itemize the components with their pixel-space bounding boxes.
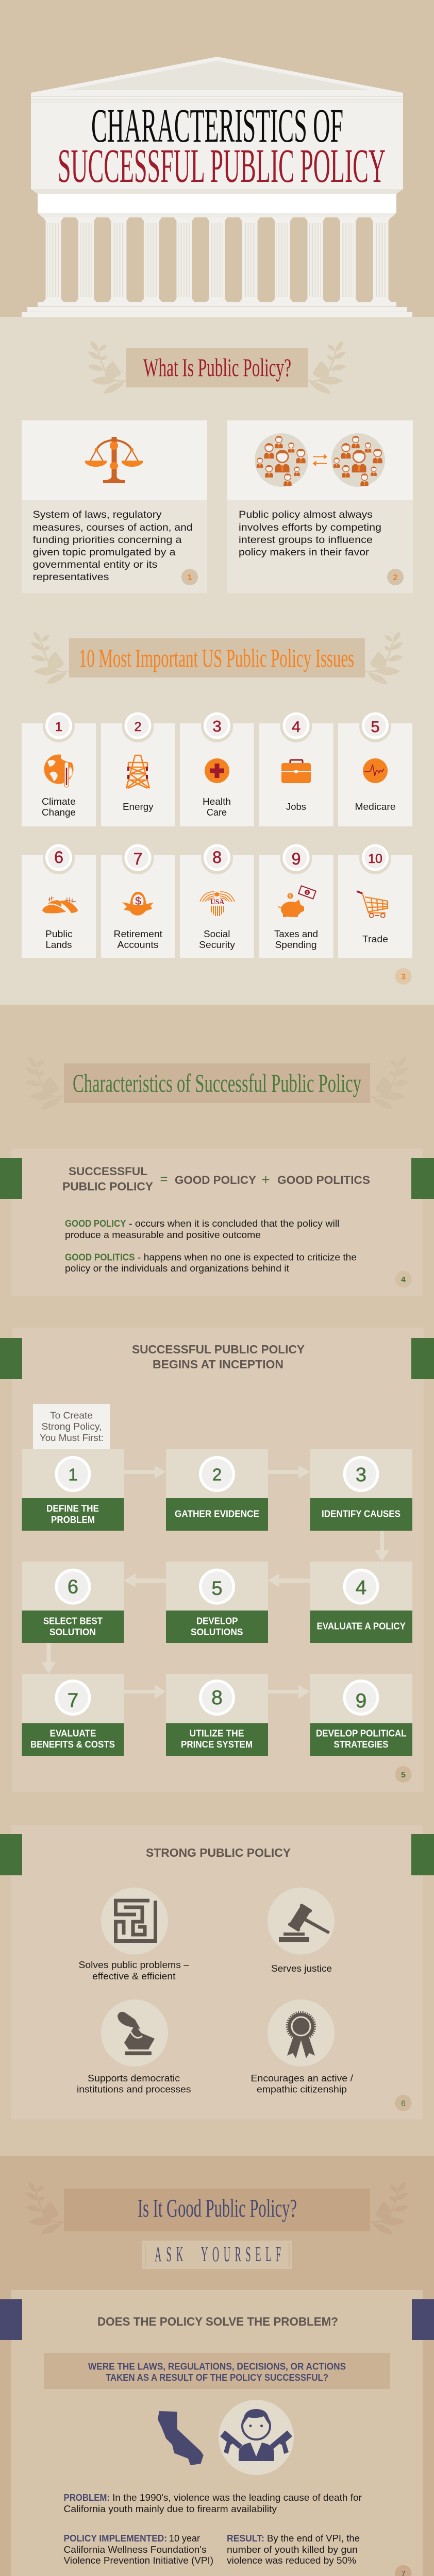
label (203, 796, 231, 818)
label: Retirement (113, 929, 162, 939)
definition: good politics (65, 1252, 357, 1274)
icon: competing interest groups (255, 433, 385, 487)
issue card 3: health care: 3 (212, 717, 222, 735)
issue card 10: trade: 10 (368, 852, 382, 866)
question box (44, 2353, 390, 2389)
icon: shopping cart (357, 891, 388, 918)
definition: good politics: GOOD POLITICS (65, 1252, 135, 1262)
formula: GOOD POLICY (175, 1174, 256, 1187)
label (113, 929, 162, 950)
step 6: SELECT BEST (43, 1616, 103, 1626)
side tabs (0, 1834, 434, 1875)
icon: nest egg: $ (135, 895, 141, 907)
formula: GOOD POLITICS (277, 1174, 370, 1187)
step 2: 2 (212, 1465, 222, 1484)
question box: TAKEN AS A RESULT OF THE POLICY SUCCESSFUL? (106, 2372, 328, 2383)
text: result (227, 2533, 360, 2566)
label: Lands (45, 940, 72, 950)
icon: briefcase (281, 760, 311, 783)
label (251, 2073, 354, 2095)
label (42, 796, 76, 818)
panel: does the policy solve the problem (0, 2290, 434, 2576)
label: empathic citizenship (257, 2084, 347, 2095)
page number 1: 1 (188, 573, 192, 582)
panel: successful public policy begins at inception (0, 1328, 434, 1792)
text: definition 2: interest groups to influence (239, 534, 373, 546)
issue card 9: taxes and spending (259, 842, 333, 958)
label (78, 1959, 190, 1981)
panel: good policy plus good politics (0, 1148, 434, 1296)
step 6: SOLUTION (49, 1627, 96, 1637)
panel title: BEGINS AT INCEPTION (153, 1358, 283, 1371)
label (77, 2073, 191, 2095)
icon: hand casting a vote (118, 2012, 155, 2055)
steps (22, 302, 412, 317)
text: definition 1: given topic promulgated by a (33, 547, 176, 558)
icon: land plots (42, 896, 78, 913)
label: Public (45, 929, 73, 939)
label: Accounts (118, 940, 159, 950)
entablature (31, 93, 403, 217)
text: problem: California youth mainly due to firearm availability (64, 2504, 277, 2514)
page number 3: 3 (401, 973, 406, 981)
text: definition 1: representatives (33, 571, 109, 583)
step 1 (22, 1449, 124, 1531)
issue card 10: trade (338, 842, 412, 958)
page number 4 (395, 1271, 411, 1287)
page number 7 (395, 2565, 411, 2576)
icon: scales of justice (85, 437, 143, 483)
panel title: SUCCESSFUL PUBLIC POLICY (132, 1343, 305, 1356)
banner: ask yourself: YOURSELF (201, 2243, 286, 2266)
panel: definition card 1 (22, 420, 207, 593)
label (274, 929, 318, 950)
heading: 10 most important issues (31, 632, 403, 684)
text: result: number of youth killed by gun (227, 2545, 358, 2555)
label: Social (204, 929, 230, 939)
step 6 (22, 1562, 124, 1643)
step 9 (310, 1674, 412, 1756)
icon: gavel (279, 1903, 330, 1942)
text: definition 2: involves efforts by competing (239, 522, 381, 533)
question box: WERE THE LAWS, REGULATIONS, DECISIONS, OR ACTIONS (88, 2362, 346, 2372)
icon: power tower (126, 755, 149, 788)
step 2 (166, 1449, 268, 1531)
text: policy implemented: California Wellness Foundation's (64, 2545, 206, 2555)
callout: to create strong policy: Strong Policy, (41, 1421, 102, 1432)
issue card 9: taxes and spending: 9 (292, 850, 301, 868)
step 4: 4 (356, 1577, 366, 1599)
step 7: EVALUATE (49, 1728, 96, 1739)
label (45, 929, 73, 950)
label: Serves justice (271, 1963, 332, 1974)
text: definition 1 (33, 509, 193, 583)
page number 6: 6 (401, 2099, 406, 2108)
step 8: PRINCE SYSTEM (181, 1739, 253, 1750)
step 5: 5 (211, 1578, 223, 1599)
icon: heartbeat (363, 758, 388, 783)
banner: ask yourself (142, 2241, 292, 2269)
text: problem: PROBLEM: (64, 2493, 110, 2503)
step 5 (166, 1562, 268, 1643)
page number 6 (395, 2095, 411, 2111)
step 1: PROBLEM (51, 1515, 95, 1525)
text: definition 2: policy makers in their favor (239, 547, 370, 558)
issue card 1: climate change: 1 (55, 720, 62, 734)
icon: globe and thermometer (44, 754, 73, 787)
icon: piggy bank with coin and bill: $ (289, 894, 292, 899)
text: definition 1: measures, courses of action, and (33, 522, 193, 533)
heading: characteristics of successful public policy (26, 1057, 408, 1109)
text: definition 1: System of laws, regulatory (33, 509, 162, 520)
step 7 (22, 1674, 124, 1756)
formula: = (160, 1171, 168, 1187)
label: Solves public problems – (78, 1959, 190, 1970)
definition: good policy: - occurs when it is concluded that the policy will (129, 1218, 339, 1229)
icon: maze (115, 1901, 156, 1941)
text: policy implemented: Violence Prevention Initiative (VPI) (64, 2555, 213, 2566)
heading: what is public policy (88, 341, 346, 394)
panel title (132, 1343, 305, 1371)
section background: header (0, 0, 434, 317)
text: problem (64, 2493, 362, 2514)
label: Health (203, 796, 231, 807)
panel: strong public policy (0, 1825, 434, 2120)
text: definition 1: funding priorities concerning a (33, 534, 182, 546)
definition: good politics: policy or the individuals and organizations behind it (65, 1263, 289, 1274)
issue card 3: health care (180, 710, 254, 826)
label: Trade (362, 934, 388, 944)
issue card 5: medicare: 5 (371, 718, 380, 736)
panel title: DOES THE POLICY SOLVE THE PROBLEM? (97, 2315, 338, 2328)
issue card 1: climate change (22, 710, 96, 826)
step 4 (310, 1562, 412, 1643)
issue card 7: retirement accounts: 7 (133, 850, 142, 868)
icon: medical cross (205, 758, 229, 783)
text: problem: In the 1990's, violence was the leading cause of death for (112, 2493, 362, 2503)
step 8: 8 (211, 1687, 223, 1709)
heading: is it good public policy (26, 2182, 408, 2234)
step 8 (166, 1674, 268, 1756)
definition: good policy: produce a measurable and positive outcome (65, 1230, 261, 1240)
text: result: RESULT: (227, 2533, 264, 2544)
section background: what is public policy and issues (0, 317, 434, 1005)
step 4: EVALUATE A POLICY (316, 1621, 406, 1631)
text: definition 2 (239, 509, 381, 558)
label: Medicare (355, 802, 396, 812)
page number 5: 5 (401, 1771, 406, 1780)
issue card 5: medicare (338, 710, 412, 826)
section background: is it good public policy (0, 2156, 434, 2576)
definition: good policy: GOOD POLICY (65, 1218, 126, 1229)
formula: SUCCESSFUL (69, 1165, 147, 1178)
label: Care (207, 807, 227, 818)
icon: nest egg (122, 892, 154, 916)
trait: encourages active citizenship (251, 1999, 354, 2095)
text: definition 1: governmental entity or its (33, 559, 158, 570)
label: Supports democratic (88, 2073, 180, 2083)
page number 5 (395, 1766, 411, 1783)
step 1: DEFINE THE (46, 1503, 99, 1514)
label: Spending (275, 940, 316, 950)
step 7: 7 (68, 1690, 78, 1711)
callout: to create strong policy: You Must First: (40, 1433, 104, 1443)
heading: is it good public policy: Is It Good Public Policy? (138, 2194, 297, 2223)
issue card 6: public lands (22, 842, 96, 958)
step 9: DEVELOP POLITICAL (316, 1728, 407, 1739)
label: Encourages an active / (251, 2073, 354, 2083)
panel title: STRONG PUBLIC POLICY (146, 1846, 291, 1859)
icon: piggy bank with coin and bill (278, 886, 316, 917)
issue card 6: public lands: 6 (54, 848, 63, 867)
step 1: 1 (68, 1465, 78, 1484)
step 3 (310, 1449, 412, 1531)
step 7: BENEFITS & COSTS (30, 1739, 115, 1750)
arrows between steps (41, 1465, 389, 1699)
side tabs (0, 1338, 434, 1379)
side tabs (0, 1158, 434, 1199)
side tabs (0, 2299, 434, 2340)
page number 4: 4 (401, 1276, 406, 1284)
trait: serves justice (268, 1888, 335, 1974)
title (58, 99, 386, 193)
trait: solves public problems (78, 1888, 190, 1981)
temple illustration with title (22, 57, 412, 317)
step 3: 3 (356, 1464, 366, 1486)
label: Security (199, 940, 235, 950)
columns (43, 217, 391, 302)
issue card 8: social security: 8 (212, 848, 222, 867)
label: Jobs (286, 802, 306, 812)
label: institutions and processes (77, 2084, 191, 2095)
label: Climate (42, 796, 76, 807)
label: Change (42, 807, 76, 818)
step 2: GATHER EVIDENCE (175, 1509, 259, 1519)
issue card 4: jobs (259, 710, 333, 826)
icon: california map (158, 2411, 204, 2465)
step 6: 6 (68, 1577, 78, 1598)
definition: good politics: - happens when no one is expected to criticize the (138, 1252, 357, 1262)
issue card 4: jobs: 4 (292, 718, 301, 736)
text: result: By the end of VPI, the (267, 2533, 360, 2544)
step 3: IDENTIFY CAUSES (322, 1509, 400, 1519)
page number 2: 2 (393, 573, 398, 582)
heading: what is public policy: What Is Public Policy? (143, 353, 291, 382)
callout: to create strong policy: To Create (50, 1411, 93, 1421)
step 5: DEVELOP (196, 1616, 238, 1626)
section background: characteristics (0, 1005, 434, 2156)
formula (62, 1165, 370, 1193)
label: Taxes and (274, 929, 318, 939)
icon: piggy bank with coin and bill: $ (305, 890, 309, 895)
issue card 8: social security (180, 842, 254, 958)
page number 1 (181, 569, 198, 585)
icon: award ribbon (287, 2012, 315, 2058)
panel: definition card 2 (227, 420, 413, 593)
issue card 2: energy: 2 (135, 720, 141, 734)
issue card 2: energy (101, 710, 175, 826)
label: Energy (123, 802, 154, 812)
issue card 7: retirement accounts (101, 842, 175, 958)
label (199, 929, 235, 950)
step 8: UTILIZE THE (190, 1728, 244, 1739)
banner: ask yourself: ASK (155, 2243, 188, 2266)
text: policy implemented: 10 year (169, 2533, 200, 2544)
text: result: violence was reduced by 50% (227, 2555, 356, 2566)
text: policy implemented: POLICY IMPLEMENTED: (64, 2533, 167, 2544)
step 5: SOLUTIONS (191, 1627, 243, 1637)
formula: + (261, 1172, 270, 1188)
formula: PUBLIC POLICY (62, 1180, 153, 1193)
page number 3 (395, 968, 411, 985)
callout: to create strong policy (33, 1404, 110, 1449)
text: definition 2: Public policy almost always (239, 509, 373, 520)
text: policy implemented (64, 2533, 213, 2566)
trait: supports democratic institutions (77, 1999, 191, 2095)
step 9: 9 (356, 1690, 366, 1712)
definition: good policy (65, 1218, 339, 1240)
step 9: STRATEGIES (334, 1739, 389, 1750)
page number 2 (387, 569, 404, 585)
icon: USA eagle shield: USA (210, 898, 224, 906)
label: effective & efficient (92, 1971, 175, 1981)
icon: USA eagle shield (200, 892, 235, 916)
pediment (31, 57, 403, 96)
icon: youth and guns (214, 2400, 298, 2475)
